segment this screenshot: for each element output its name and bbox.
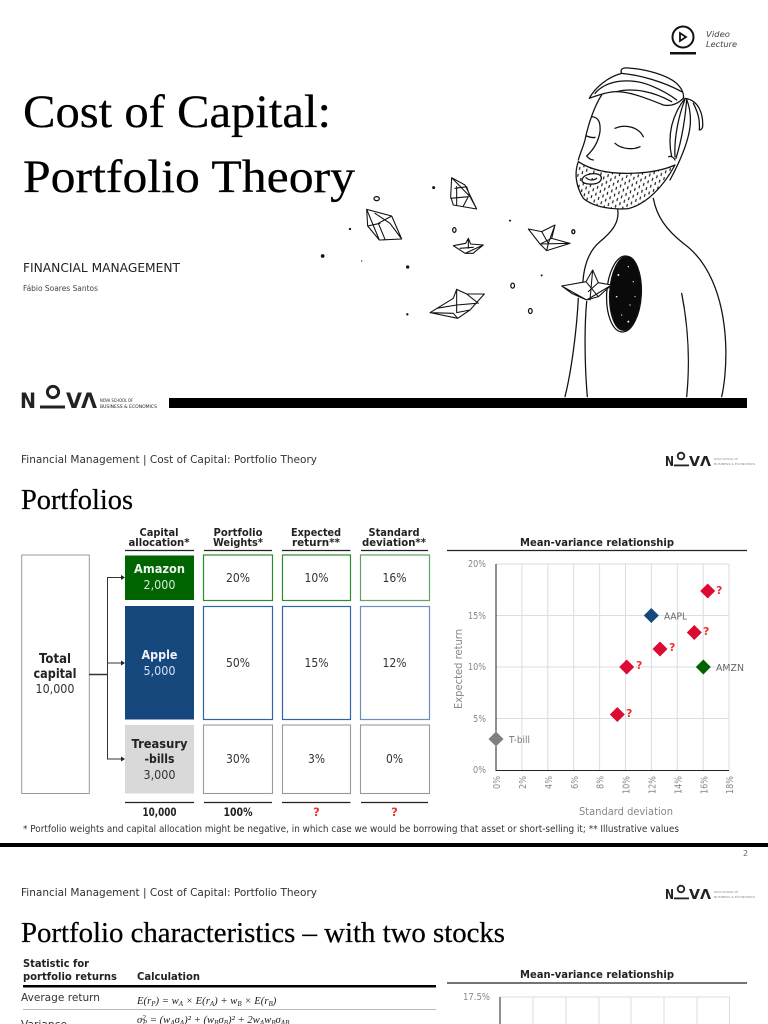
table: portfolio statistics	[21, 957, 436, 1024]
row: variance	[21, 1014, 290, 1024]
data points: ?	[626, 707, 632, 720]
x axis labels: 12%	[648, 776, 658, 794]
table cells: apple row: 12%	[382, 656, 406, 670]
table totals: ?	[313, 805, 320, 819]
data points: ?	[716, 584, 722, 597]
row: average return: A	[178, 1000, 184, 1008]
data points: AMZN	[716, 663, 744, 674]
table header: Calculation	[137, 970, 200, 983]
arrows: allocation connectors	[89, 575, 125, 762]
table totals: ?	[391, 805, 398, 819]
icon: video lecture	[670, 26, 737, 54]
table cells: apple row: 15%	[304, 656, 328, 670]
axis titles	[453, 629, 673, 818]
row: average return: Average return	[21, 991, 100, 1004]
treasury bills block	[125, 725, 194, 794]
subtitle: FINANCIAL MANAGEMENT	[23, 260, 180, 275]
x axis labels: 16%	[700, 776, 710, 794]
footnote: * Portfolio weights and capital allocation might be negative, in which case we would be borrowing that asset or short-selling it; ** Illustrative values	[23, 824, 679, 835]
hair	[589, 68, 703, 180]
data points: T-bill	[508, 735, 530, 746]
y axis label: 17.5%	[463, 992, 490, 1003]
table totals: 10,000	[142, 805, 176, 819]
data points: ?	[669, 641, 675, 654]
row: average return: × E(r	[183, 995, 211, 1007]
table header: portfolio returns	[23, 970, 117, 983]
small logo: NOVA SCHOOL OF	[714, 457, 738, 461]
title: Cost of Capital:	[23, 86, 331, 138]
amazon block	[125, 556, 194, 600]
apple block: 5,000	[144, 663, 176, 678]
small logo: N	[665, 455, 674, 470]
x axis labels	[492, 776, 736, 794]
table cells: apple row	[204, 606, 430, 720]
x axis labels: 8%	[596, 776, 606, 789]
slide divider	[0, 843, 768, 847]
x axis labels: 6%	[570, 776, 581, 789]
author: Fábio Soares Santos	[23, 284, 98, 293]
table cells: treasury row	[204, 725, 430, 794]
total capital box: 10,000	[36, 681, 75, 696]
column headers: Portfolio	[214, 526, 263, 539]
chest hole with stars	[605, 255, 643, 333]
small logo: Λ	[700, 455, 711, 470]
column headers: deviation**	[362, 536, 426, 549]
data points: AAPL	[664, 612, 688, 622]
amazon block: 2,000	[144, 577, 176, 592]
footer bar	[169, 398, 747, 408]
y axis labels: 5%	[473, 714, 486, 725]
panel: title slide	[20, 26, 747, 413]
axis titles: Standard deviation	[579, 806, 673, 818]
small logo: BUSINESS & ECONOMICS	[714, 462, 755, 466]
slide header: Financial Management | Cost of Capital: Portfolio Theory	[21, 453, 317, 466]
row: average return: )	[272, 995, 277, 1007]
treasury bills block: -bills	[144, 751, 174, 766]
dots and rings	[321, 186, 575, 315]
table header: Statistic for	[23, 957, 90, 970]
illustration: man with paper boats	[321, 68, 726, 397]
column headers	[125, 526, 428, 802]
beard	[576, 162, 675, 209]
row: variance: 2	[142, 1014, 146, 1022]
column headers: Capital	[140, 526, 178, 539]
table cells: treasury row: 30%	[226, 752, 250, 766]
apple block: Apple	[142, 647, 178, 662]
row: average return: × E(r	[242, 995, 269, 1007]
data points: ?	[636, 659, 642, 672]
slide header: Financial Management | Cost of Capital: Portfolio Theory	[21, 886, 317, 899]
row: average return	[21, 991, 277, 1008]
table totals	[142, 805, 398, 819]
x axis labels: 4%	[544, 776, 555, 789]
small logo: NOVA SCHOOL OF	[714, 890, 738, 894]
small logo	[665, 453, 755, 470]
y axis labels: 15%	[468, 611, 486, 622]
axis titles: Expected return	[453, 629, 465, 709]
mouth	[582, 174, 601, 184]
y axis labels	[468, 559, 486, 776]
small logo	[665, 886, 755, 903]
footer logo: N	[20, 389, 36, 413]
body	[565, 198, 726, 397]
chart: mean-variance scatter	[447, 536, 747, 818]
table header	[23, 957, 200, 983]
y axis labels: 20%	[468, 559, 486, 570]
chart: mean-variance second	[447, 968, 747, 1024]
title: Portfolio Theory	[23, 151, 356, 203]
x axis labels: 18%	[725, 776, 736, 794]
row: average return: A	[209, 1000, 215, 1008]
row: average return: P	[150, 1000, 156, 1008]
table cells: amazon row: 10%	[304, 571, 328, 585]
amazon block: Amazon	[134, 561, 185, 576]
panel: portfolios slide	[21, 453, 755, 835]
footer logo: Λ	[81, 389, 98, 413]
small logo: V	[689, 888, 700, 903]
table cells: amazon row: 20%	[226, 571, 250, 585]
small logo: V	[689, 455, 700, 470]
total capital box: capital	[34, 667, 76, 682]
row: average return: ) = w	[155, 995, 180, 1007]
column headers: return**	[292, 536, 340, 549]
heading: Portfolios	[21, 485, 133, 516]
table totals: 100%	[224, 805, 253, 819]
x axis labels: 14%	[674, 776, 684, 794]
footer logo: NOVA SCHOOL OF	[100, 398, 133, 404]
table cells: treasury row: 0%	[386, 752, 403, 766]
treasury bills block: 3,000	[144, 767, 176, 782]
column headers: Expected	[291, 526, 341, 539]
chart title: Mean-variance relationship	[520, 536, 674, 549]
small logo: Λ	[700, 888, 711, 903]
table cells: apple row: 50%	[226, 656, 250, 670]
data points	[488, 584, 744, 746]
y axis labels: 10%	[468, 662, 486, 673]
column headers: allocation*	[128, 536, 190, 549]
x axis labels: 10%	[622, 776, 632, 794]
row: average return: B	[237, 1000, 242, 1008]
y axis labels: 0%	[473, 765, 486, 776]
total capital box	[22, 555, 89, 794]
title	[23, 86, 356, 203]
table cells: amazon row	[204, 555, 430, 600]
row: average return: ) + w	[213, 995, 238, 1007]
small logo: N	[665, 888, 674, 903]
column headers: Weights*	[213, 536, 263, 549]
x axis labels: 0%	[492, 776, 503, 789]
total capital box: Total	[39, 652, 71, 667]
heading: Portfolio characteristics – with two stocks	[21, 918, 505, 949]
data points: ?	[703, 625, 709, 638]
footer logo: BUSINESS & ECONOMICS	[100, 404, 157, 410]
panel: portfolio characteristics slide	[21, 849, 755, 1024]
page number: 2	[743, 849, 748, 858]
icon: video lecture: Lecture	[706, 40, 737, 49]
small logo: BUSINESS & ECONOMICS	[714, 895, 755, 899]
face	[578, 95, 675, 160]
icon: video lecture: Video	[706, 30, 730, 39]
footer logo	[20, 386, 157, 413]
table cells: treasury row: 3%	[308, 752, 325, 766]
chart title: Mean-variance relationship	[520, 968, 674, 981]
apple block	[125, 606, 194, 720]
row: average return: B	[268, 1000, 274, 1008]
treasury bills block: Treasury	[132, 736, 188, 751]
paper boats	[367, 178, 612, 318]
footer logo: V	[66, 389, 83, 413]
x axis labels: 2%	[518, 776, 529, 789]
row: average return: E(r	[137, 995, 151, 1007]
table cells: amazon row: 16%	[382, 571, 406, 585]
column headers: Standard	[368, 526, 420, 539]
